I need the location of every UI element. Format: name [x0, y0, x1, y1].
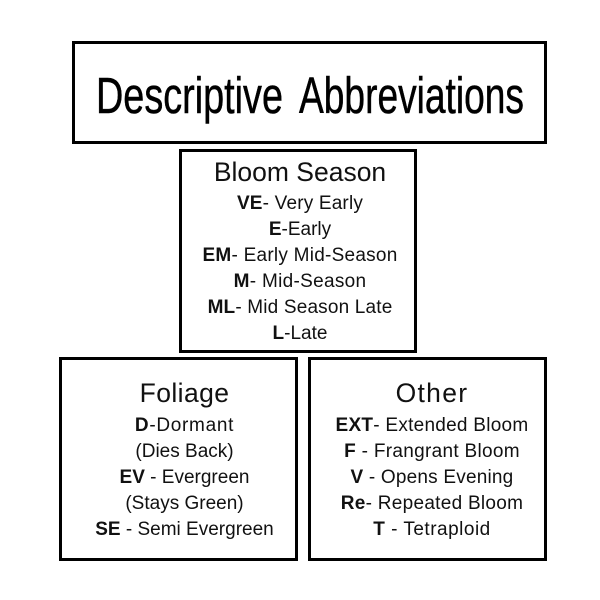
heading: foliage: Foliage: [140, 378, 229, 408]
bloom season list: M- Mid-Season: [234, 271, 366, 292]
foliage list: [95, 415, 274, 540]
title box: [72, 41, 547, 144]
foliage list: D-Dormant: [135, 415, 234, 436]
bloom season list: VE- Very Early: [237, 193, 363, 214]
bloom season list: [202, 193, 398, 344]
other list: Re- Repeated Bloom: [341, 493, 523, 514]
panel: bloom season: [179, 149, 417, 353]
bloom season list: E-Early: [269, 219, 331, 240]
foliage list: EV - Evergreen: [120, 467, 249, 488]
panel: foliage: [59, 357, 298, 561]
foliage list: (Stays Green): [125, 493, 244, 514]
other list: EXT- Extended Bloom: [336, 415, 528, 436]
title: [96, 67, 524, 124]
bloom season list: L-Late: [273, 323, 327, 344]
panel: other: [308, 357, 547, 561]
other list: V - Opens Evening: [351, 467, 513, 488]
other list: F - Frangrant Bloom: [344, 441, 520, 462]
bloom season list: ML- Mid Season Late: [208, 297, 392, 318]
other list: T - Tetraploid: [373, 519, 491, 540]
other list: [336, 415, 528, 540]
heading: bloom season: Bloom Season: [214, 157, 386, 187]
heading: other: Other: [396, 378, 468, 408]
foliage list: (Dies Back): [135, 441, 234, 462]
foliage list: SE - Semi Evergreen: [95, 519, 274, 540]
title: Descriptive: [96, 67, 283, 124]
bloom season list: EM- Early Mid-Season: [202, 245, 398, 266]
